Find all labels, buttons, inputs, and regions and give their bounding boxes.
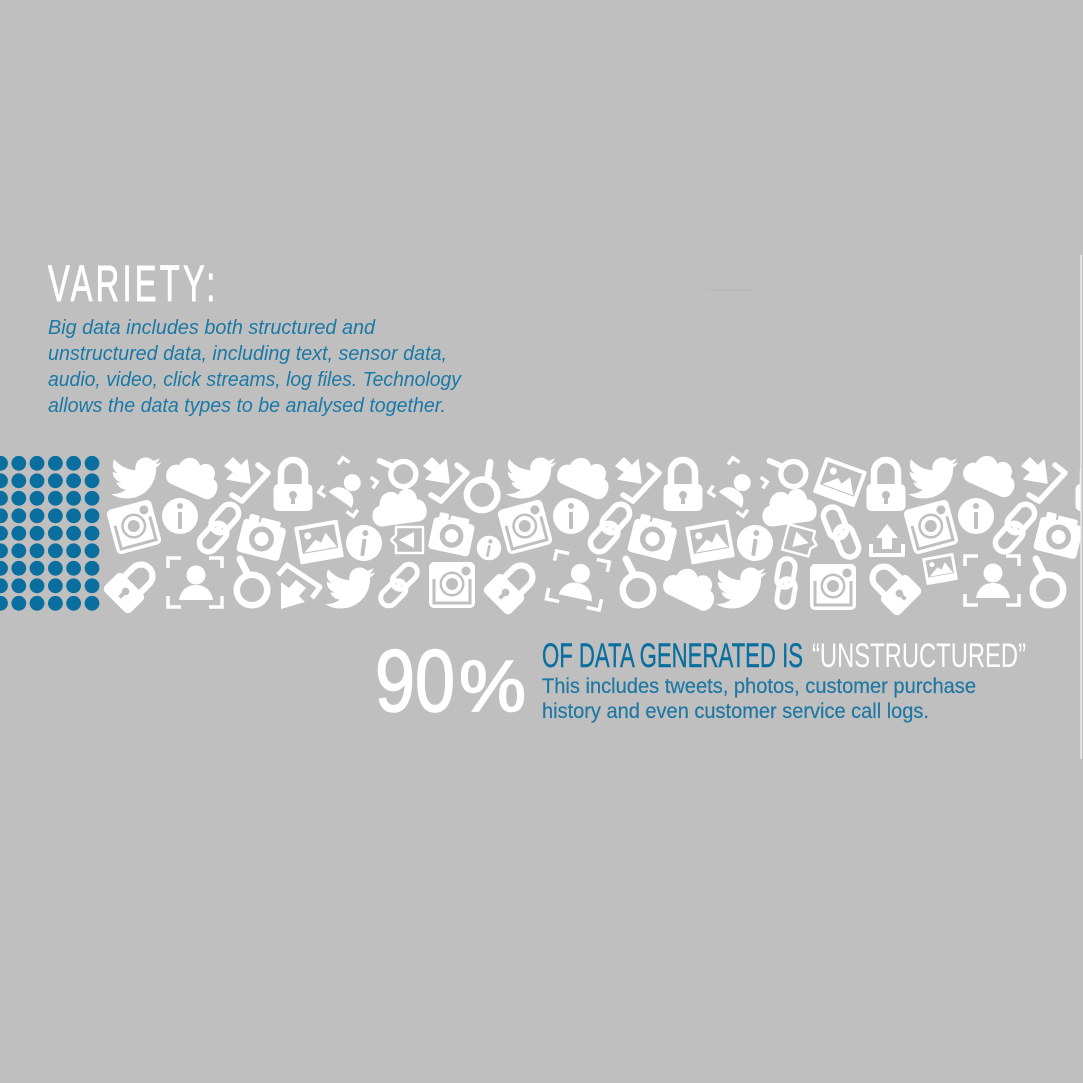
icon: instagram [429, 562, 475, 608]
icon: magnifier [623, 559, 653, 605]
faint smudge [706, 289, 754, 291]
icon: video box [391, 527, 423, 553]
stat: 90 percent [375, 631, 526, 730]
icon: cloud [372, 489, 427, 526]
icon: instagram [903, 499, 959, 555]
icon: twitter [506, 458, 556, 498]
right edge highlight line [1080, 255, 1082, 759]
icon: link [375, 561, 423, 609]
icon: picture [922, 553, 958, 585]
description text block: audio, video, click streams, log files. Technology [48, 368, 463, 391]
icon: lock [1076, 468, 1080, 511]
description text block: Big data includes both structured and [48, 316, 376, 339]
title: variety: VARIETY: [48, 256, 219, 313]
icon: cloud [963, 456, 1014, 498]
icon: magnifier [766, 458, 808, 490]
icon: cloud [557, 458, 608, 500]
icon: check and arrow [1022, 458, 1065, 501]
icon: lock [102, 555, 162, 615]
icon: camera [428, 511, 476, 557]
icon: link [989, 501, 1041, 555]
stat description: history and even customer service call logs. [542, 700, 929, 723]
icon: play box [782, 524, 820, 558]
icon: twitter [111, 458, 161, 498]
icon: magnifier [237, 559, 267, 605]
icon: info [958, 498, 994, 534]
icon: info [553, 498, 589, 534]
icon: person frame [319, 458, 377, 516]
icon: instagram [106, 499, 162, 555]
icon: link [196, 502, 242, 554]
icon: info [737, 525, 773, 561]
icon: twitter [325, 568, 375, 608]
stat: 90 percent: % [459, 647, 526, 727]
description text block: unstructured data, including text, sensor data, [48, 342, 447, 365]
icon: picture [685, 519, 735, 565]
stat description: This includes tweets, photos, customer purchase [542, 675, 976, 698]
icon: picture [294, 519, 344, 565]
icon: check and arrow [616, 458, 659, 501]
icon: person frame [546, 551, 609, 610]
icon: lock [274, 460, 312, 511]
icon: link [821, 503, 861, 561]
stat heading: OF DATA GENERATED IS [542, 637, 803, 675]
icon: lock [863, 557, 923, 617]
icon: twitter [716, 568, 766, 608]
icon: lock [482, 556, 542, 616]
icon: check and arrow [225, 458, 268, 501]
icon: upload [871, 524, 903, 555]
icon: camera [1033, 510, 1083, 560]
icon: camera [627, 512, 679, 562]
stat description [542, 675, 976, 723]
icon: instagram [810, 564, 856, 610]
description text block [48, 316, 463, 417]
icon: instagram [497, 499, 553, 555]
icon band [102, 447, 1083, 617]
icon: person frame [965, 556, 1019, 605]
icon: info [346, 525, 382, 561]
icon: picture [813, 457, 867, 507]
description text block: allows the data types to be analysed together. [48, 394, 446, 417]
icon: magnifier [464, 459, 501, 514]
stat: 90 percent: 90 [375, 631, 455, 730]
icon: twitter [908, 458, 958, 498]
icon: lock [866, 460, 906, 511]
icon: link [588, 502, 632, 554]
icon: info [162, 498, 198, 534]
dot grid [0, 456, 99, 611]
icon: cloud [660, 560, 723, 614]
icon: arrow box [278, 565, 320, 609]
icon: info small [476, 536, 502, 560]
icon: cloud [166, 458, 218, 500]
icon: lock [664, 460, 702, 511]
icon: check and arrow [424, 458, 467, 501]
icon: camera [236, 512, 288, 562]
icon: person frame [709, 458, 767, 516]
icon: link [772, 557, 800, 609]
icon: person frame [168, 558, 222, 607]
icon: magnifier [1033, 559, 1063, 605]
icon: cloud [762, 489, 817, 526]
icon: magnifier [376, 458, 418, 490]
